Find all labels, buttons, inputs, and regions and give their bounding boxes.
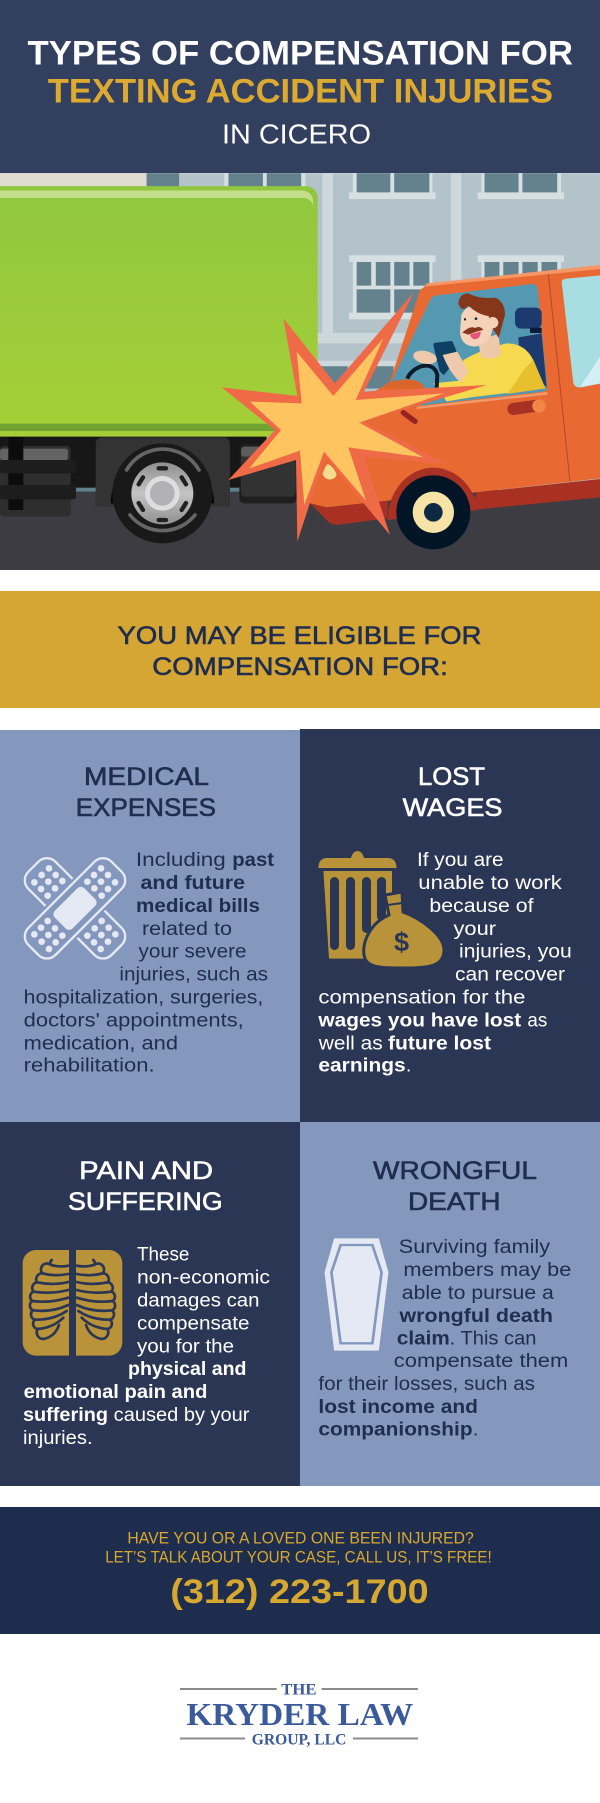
- car: [222, 265, 600, 549]
- text: lost wages body: unable to work: [418, 873, 562, 894]
- heading: medical expenses: [76, 763, 216, 822]
- text: medical expenses body: injuries, such as: [119, 964, 268, 986]
- logo: KRYDER LAW: [186, 1696, 413, 1732]
- truck: [0, 436, 297, 543]
- text: medical expenses body: your severe: [138, 942, 246, 963]
- heading: wrongful death: WRONGFUL: [373, 1157, 537, 1185]
- text: wrongful death body: compensate them: [394, 1351, 568, 1372]
- panel: medical expenses: [0, 730, 300, 1122]
- truck box: [0, 186, 318, 437]
- text: pain and suffering body: caused by your: [114, 1405, 250, 1426]
- heading: pain and suffering: [68, 1157, 223, 1216]
- gold banner: YOU MAY BE ELIGIBLE FOR: [118, 622, 482, 650]
- heading: medical expenses: EXPENSES: [76, 794, 216, 822]
- icon: empty trash can and money bag: $: [394, 927, 409, 957]
- logo: GROUP, LLC: [252, 1732, 346, 1749]
- text: pain and suffering body: damages can: [137, 1290, 260, 1312]
- panel: lost wages: [300, 729, 600, 1122]
- text: medical expenses body: related to: [142, 919, 232, 940]
- heading: lost wages: [403, 763, 502, 822]
- icon: ribcage: [23, 1248, 122, 1357]
- title: TYPES OF COMPENSATION FOR: [28, 35, 573, 73]
- text: wrongful death body: claim: [397, 1328, 450, 1350]
- call to action footer: HAVE YOU OR A LOVED ONE BEEN INJURED?: [127, 1529, 474, 1547]
- text: pain and suffering body: compensate: [137, 1313, 250, 1334]
- text: lost wages body: your: [454, 919, 497, 940]
- text: lost wages body: can recover: [455, 964, 566, 986]
- text: lost wages body: wages you have lost: [317, 1010, 522, 1032]
- text: pain and suffering body: [23, 1245, 270, 1449]
- text: medical expenses body: medication, and: [24, 1034, 178, 1054]
- panel: wrongful death: [300, 1122, 600, 1486]
- text: medical expenses body: past: [232, 850, 275, 871]
- call to action footer: LET’S TALK ABOUT YOUR CASE, CALL US, IT’S FREE!: [105, 1548, 492, 1566]
- gold banner: [0, 591, 600, 708]
- text: wrongful death body: members may be: [403, 1260, 571, 1281]
- phone number: (312) 223-1700: [170, 1573, 429, 1611]
- text: lost wages body: [317, 850, 572, 1076]
- heading: lost wages: LOST: [418, 763, 485, 791]
- heading: pain and suffering: PAIN AND: [79, 1157, 213, 1185]
- text: medical expenses body: hospitalization, surgeries,: [24, 988, 263, 1008]
- logo: THE: [281, 1682, 316, 1699]
- text: medical expenses body: rehabilitation.: [24, 1056, 155, 1076]
- text: wrongful death body: lost income and: [318, 1397, 478, 1418]
- text: medical expenses body: and future: [140, 873, 245, 894]
- text: lost wages body: future lost: [388, 1034, 492, 1054]
- text: lost wages body: compensation for the: [318, 988, 526, 1008]
- text: pain and suffering body: you for the: [137, 1336, 234, 1357]
- heading: wrongful death: [373, 1157, 537, 1216]
- panel: pain and suffering: [0, 1122, 300, 1486]
- text: pain and suffering body: These: [137, 1245, 189, 1266]
- text: wrongful death body: wrongful death: [398, 1306, 553, 1327]
- call to action footer: [0, 1507, 600, 1634]
- text: medical expenses body: [24, 850, 275, 1076]
- driver: [407, 293, 547, 401]
- text: medical expenses body: doctors' appointments,: [24, 1010, 244, 1032]
- illustration: texting driver crashing into truck: [0, 173, 600, 570]
- text: pain and suffering body: emotional pain and: [24, 1382, 207, 1403]
- text: pain and suffering body: physical and: [128, 1359, 246, 1380]
- text: lost wages body: as: [527, 1010, 547, 1032]
- icon: bandages: [20, 853, 130, 963]
- text: medical expenses body: medical bills: [136, 896, 260, 917]
- text: pain and suffering body: non-economic: [137, 1268, 270, 1289]
- text: lost wages body: .: [406, 1056, 411, 1076]
- heading: pain and suffering: SUFFERING: [68, 1188, 223, 1216]
- icon: coffin: [325, 1238, 388, 1351]
- title: IN CICERO: [222, 118, 371, 150]
- text: wrongful death body: able to pursue a: [402, 1283, 554, 1304]
- text: wrongful death body: for their losses, such as: [318, 1374, 535, 1395]
- text: pain and suffering body: suffering: [23, 1405, 108, 1426]
- title: TEXTING ACCIDENT INJURIES: [48, 72, 553, 110]
- text: wrongful death body: Surviving family: [399, 1237, 551, 1258]
- building background: [0, 173, 600, 490]
- text: lost wages body: injuries, you: [459, 942, 572, 963]
- crash burst: [222, 292, 487, 542]
- heading: wrongful death: DEATH: [408, 1188, 501, 1216]
- logo: [180, 1682, 418, 1749]
- text: wrongful death body: [318, 1237, 571, 1441]
- text: wrongful death body: companionship: [318, 1420, 473, 1441]
- icon: empty trash can and money bag: [318, 851, 444, 968]
- heading: medical expenses: MEDICAL: [84, 763, 209, 791]
- gold banner: COMPENSATION FOR:: [152, 653, 448, 681]
- text: pain and suffering body: injuries.: [23, 1428, 93, 1449]
- heading: lost wages: WAGES: [403, 794, 502, 822]
- text: lost wages body: earnings: [318, 1056, 406, 1076]
- text: wrongful death body: .: [473, 1420, 478, 1441]
- text: lost wages body: If you are: [417, 850, 504, 871]
- text: wrongful death body: . This can: [450, 1328, 536, 1350]
- text: lost wages body: because of: [429, 896, 534, 917]
- text: medical expenses body: Including: [136, 850, 226, 871]
- road: [0, 490, 600, 570]
- title: [0, 0, 600, 173]
- text: lost wages body: well as: [318, 1034, 383, 1054]
